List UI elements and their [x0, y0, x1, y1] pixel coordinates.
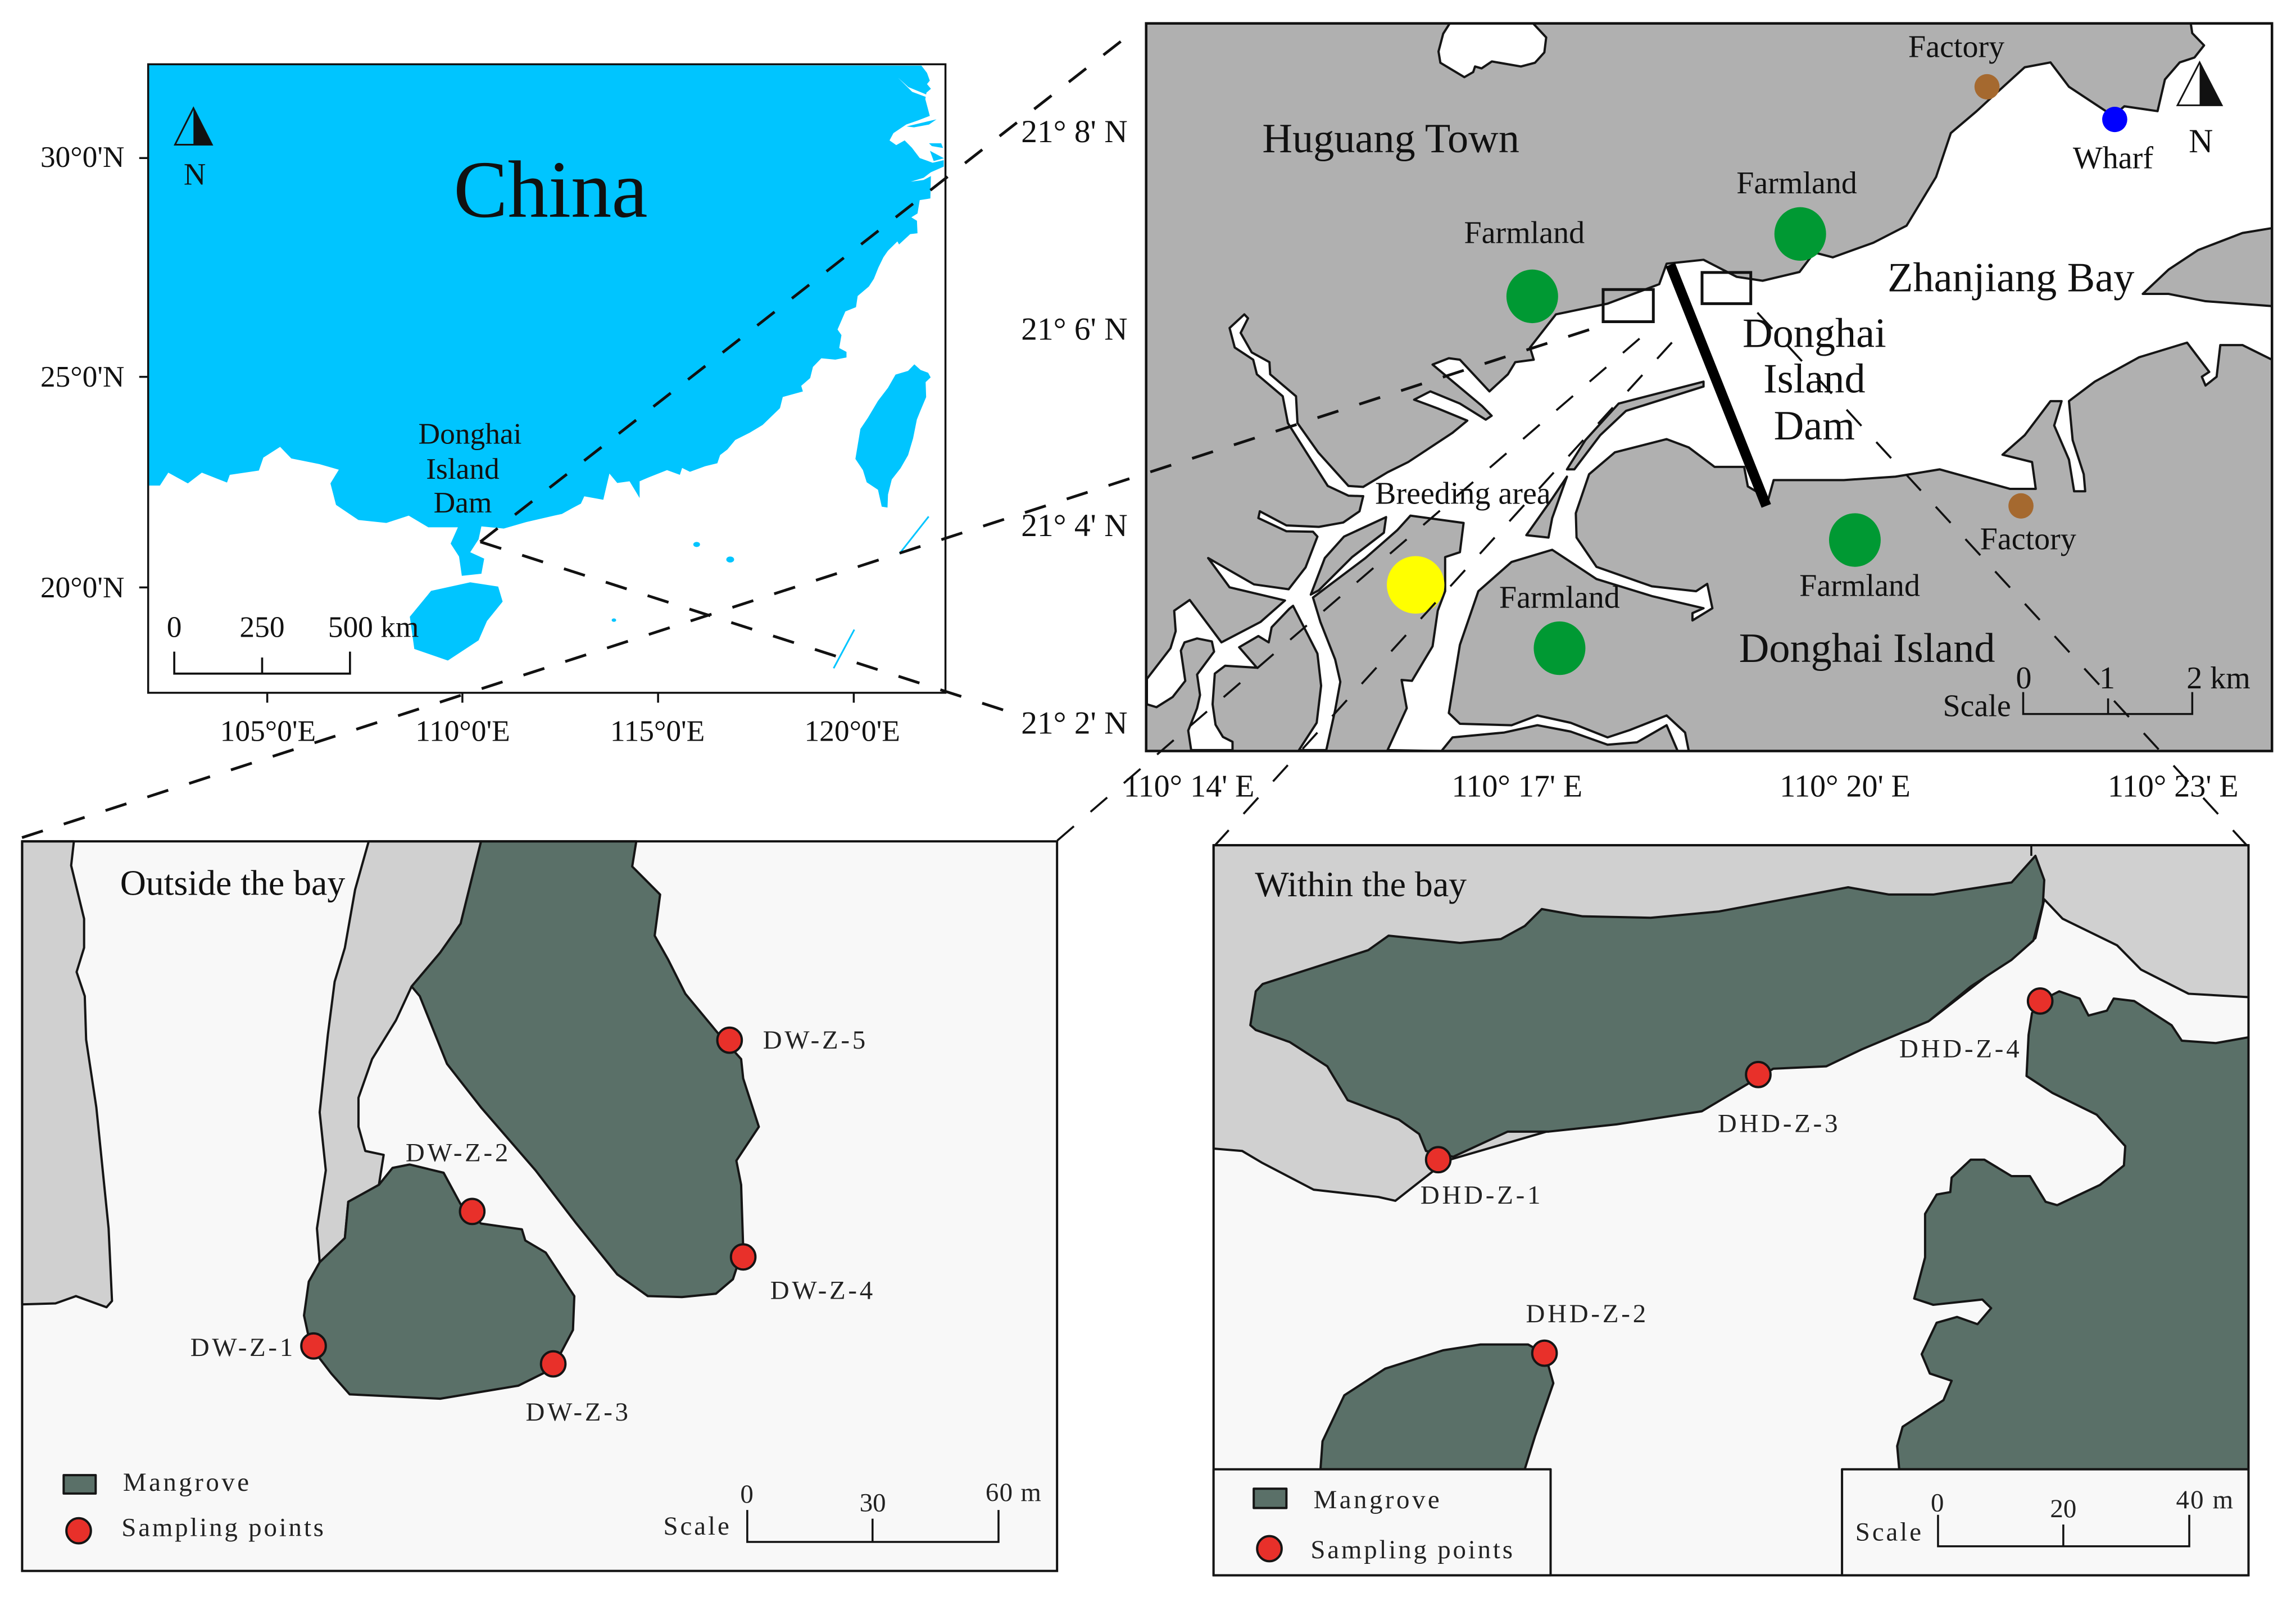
Zhanjiang Bay map labels: Island — [1763, 356, 1866, 402]
sampling points — [1426, 988, 2053, 1366]
within bay labels: 40 m — [2176, 1485, 2233, 1514]
China map labels: 20°0'N — [40, 570, 125, 604]
China map labels: Island — [426, 452, 500, 486]
north-east coastal inlets and islets — [898, 78, 944, 161]
Zhanjiang Bay map labels: 110° 20' E — [1780, 769, 1911, 804]
Zhanjiang Bay map labels: 0 — [2016, 661, 2031, 696]
scale bar — [747, 1510, 999, 1542]
China map labels: 120°0'E — [804, 714, 900, 748]
Zhanjiang Bay map labels: Zhanjiang Bay — [1887, 255, 2134, 301]
Zhanjiang Bay map labels: 1 — [2099, 661, 2115, 696]
land and water — [1146, 24, 2272, 751]
outside bay labels: Scale — [664, 1512, 729, 1541]
within bay labels: DHD-Z-2 — [1526, 1299, 1646, 1328]
within bay labels — [1255, 864, 2233, 1564]
outside bay labels: 60 m — [986, 1478, 1041, 1507]
Zhanjiang Bay map labels: 21° 6' N — [1021, 312, 1128, 347]
sampling points — [301, 1028, 755, 1376]
outside bay labels: DW-Z-2 — [406, 1138, 508, 1168]
outside bay labels: Outside the bay — [120, 863, 345, 902]
Zhanjiang Bay map labels — [1021, 30, 2250, 804]
Zhanjiang Bay map labels: Farmland — [1799, 569, 1920, 604]
site boxes — [1603, 273, 1751, 321]
Taiwan island — [855, 364, 931, 507]
within bay labels: DHD-Z-1 — [1421, 1181, 1541, 1210]
factory markers — [1975, 74, 2034, 519]
map frame and ticks — [139, 64, 946, 702]
coast and mangrove shapes — [22, 841, 1057, 1571]
legend symbols — [63, 1475, 96, 1544]
Zhanjiang Bay map labels: Farmland — [1499, 580, 1620, 615]
outside bay labels — [120, 863, 1041, 1542]
panel: within the bay — [1214, 845, 2248, 1575]
Zhanjiang Bay map labels: 110° 23' E — [2108, 769, 2239, 804]
Zhanjiang Bay map labels: Dam — [1774, 403, 1855, 449]
Zhanjiang Bay map labels: Donghai Island — [1739, 625, 1995, 672]
legend and scale boxes — [1214, 1469, 2248, 1575]
within bay labels: Scale — [1855, 1518, 1921, 1547]
lake — [1439, 24, 1546, 77]
Zhanjiang Bay map labels: 110° 14' E — [1124, 769, 1254, 804]
within bay labels: DHD-Z-4 — [1899, 1035, 2020, 1064]
connecting dashed lines, bay boxes — [1058, 306, 2248, 846]
Zhanjiang Bay map labels: 21° 8' N — [1021, 114, 1128, 149]
China map labels: N — [184, 157, 206, 191]
within bay labels: Sampling points — [1310, 1535, 1513, 1564]
scale bar — [174, 652, 350, 674]
China map labels: 115°0'E — [610, 714, 705, 748]
outside bay labels: Mangrove — [123, 1468, 249, 1497]
coast and mangrove shapes — [1214, 845, 2248, 1575]
outside bay labels: 30 — [860, 1488, 886, 1517]
China map labels: 250 — [239, 610, 285, 644]
panel: outside the bay — [22, 841, 1057, 1571]
outside bay labels: DW-Z-1 — [190, 1333, 293, 1362]
China map labels: 500 km — [328, 610, 419, 644]
China map labels: China — [453, 145, 648, 235]
outside bay labels: 0 — [740, 1480, 754, 1509]
China map labels: 30°0'N — [40, 140, 125, 174]
Zhanjiang Bay map labels: Farmland — [1464, 216, 1585, 251]
breeding area marker — [1387, 556, 1444, 614]
within bay labels: 0 — [1931, 1488, 1944, 1517]
Zhanjiang Bay map labels: Wharf — [2073, 141, 2153, 176]
Zhanjiang Bay map labels: Donghai — [1743, 311, 1886, 357]
China map labels: Dam — [434, 486, 492, 519]
outside bay labels: DW-Z-3 — [526, 1398, 628, 1427]
Zhanjiang Bay map labels: Huguang Town — [1262, 116, 1519, 162]
within bay labels: 20 — [2050, 1494, 2076, 1523]
wharf marker — [2102, 107, 2127, 132]
within bay labels: DHD-Z-3 — [1718, 1109, 1838, 1138]
China map labels — [40, 140, 900, 748]
Zhanjiang Bay map labels: Factory — [1980, 521, 2076, 556]
within bay labels: Within the bay — [1255, 864, 1467, 904]
outside bay labels: DW-Z-5 — [763, 1026, 865, 1055]
Zhanjiang Bay map labels: Breeding area — [1375, 476, 1551, 511]
Donghai Island Dam — [1671, 265, 1766, 506]
panel: China location map — [40, 64, 946, 748]
farmland markers — [1507, 207, 1881, 675]
within bay labels: Mangrove — [1314, 1485, 1440, 1514]
China map labels: 25°0'N — [40, 360, 125, 393]
Zhanjiang Bay map labels: 110° 17' E — [1451, 769, 1582, 804]
Zhanjiang Bay map labels: 2 km — [2186, 661, 2250, 696]
scale bar — [2023, 692, 2192, 714]
Zhanjiang Bay map labels: 21° 4' N — [1021, 508, 1128, 543]
icon: north arrow — [175, 108, 212, 144]
map frame — [1146, 24, 2272, 751]
China map labels: 0 — [167, 610, 181, 644]
panel: Zhanjiang Bay map — [1146, 24, 2272, 751]
legend symbols — [1254, 1489, 1286, 1561]
China map labels: 110°0'E — [415, 714, 510, 748]
map of coastal China — [148, 64, 944, 668]
Zhanjiang Bay map labels: Farmland — [1736, 166, 1857, 201]
outside bay labels: Sampling points — [121, 1513, 324, 1542]
Zhanjiang Bay map labels: Scale — [1943, 688, 2011, 723]
outside bay labels: DW-Z-4 — [770, 1276, 873, 1305]
Zhanjiang Bay map labels: 21° 2' N — [1021, 706, 1128, 741]
China map labels: 105°0'E — [220, 714, 316, 748]
China map labels: Donghai — [419, 417, 521, 451]
Zhanjiang Bay map labels: Factory — [1908, 30, 2004, 65]
connecting dashed lines, China map — [22, 29, 1608, 838]
Zhanjiang Bay map labels: N — [2189, 123, 2213, 160]
scale bar — [1938, 1515, 2189, 1546]
icon: north arrow — [2177, 62, 2222, 105]
